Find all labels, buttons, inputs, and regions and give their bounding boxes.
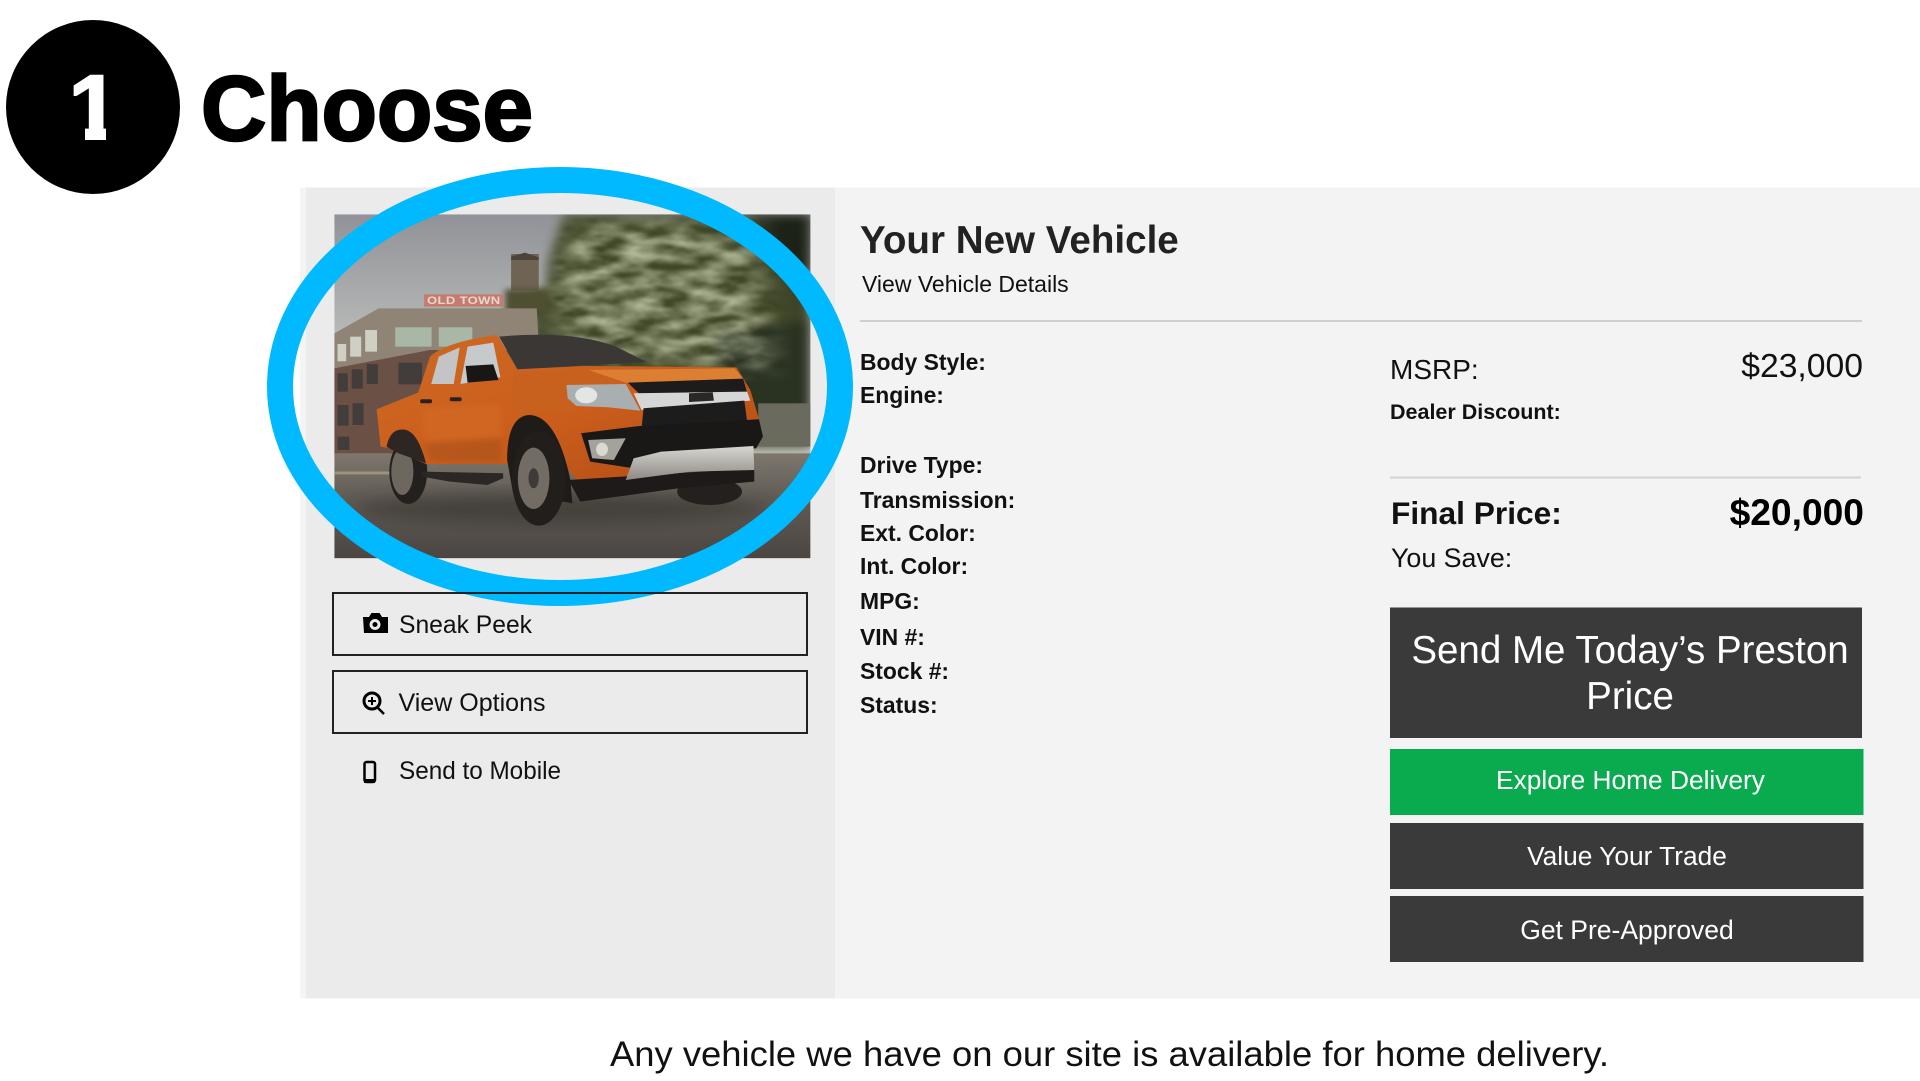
- button: Explore Home Delivery: Explore Home Delivery: [1496, 765, 1766, 795]
- pricing block: [1390, 347, 1864, 573]
- button: Get Pre-Approved: Get Pre-Approved: [1520, 915, 1734, 945]
- front wheel arch: [507, 415, 572, 503]
- button: Send Me Today's Preston Price: Price: [1586, 675, 1674, 718]
- fog lamp: [588, 438, 626, 460]
- vehicle specification labels: MPG:: [860, 588, 920, 614]
- link: view vehicle details: View Vehicle Details: [862, 271, 1069, 297]
- button: Sneak Peek: Sneak Peek: [399, 611, 532, 639]
- main grille: [642, 401, 747, 428]
- vehicle photo: orange pickup truck: [334, 214, 810, 558]
- highlight ellipse: [280, 180, 840, 593]
- button: Send Me Today's Preston Price: Send Me Today’s Preston: [1411, 629, 1849, 672]
- button: View Options: View Options: [398, 689, 546, 717]
- pricing block: $23,000: [1741, 347, 1863, 385]
- truck body: [377, 335, 760, 480]
- lower body black: [568, 468, 754, 502]
- button: Value Your Trade: [1390, 823, 1864, 889]
- vehicle heading: Your New Vehicle: [860, 219, 1179, 262]
- bumper: [581, 419, 763, 468]
- button: Get Pre-Approved: [1390, 896, 1864, 962]
- pricing block: Final Price:: [1391, 495, 1562, 531]
- door handles: [420, 399, 432, 403]
- pricing block: MSRP:: [1390, 354, 1479, 385]
- button: Value Your Trade: Value Your Trade: [1527, 841, 1727, 871]
- vehicle specification labels: Stock #:: [860, 658, 949, 684]
- button: View Options: [333, 671, 807, 733]
- step number badge: 1: [68, 57, 120, 159]
- panel: vehicle media column: [300, 188, 835, 998]
- side windows: [431, 347, 460, 384]
- icon: zoom magnifier: [364, 693, 384, 714]
- vehicle specification labels: Engine:: [860, 382, 944, 408]
- vehicle specification labels: Int. Color:: [860, 553, 968, 579]
- vehicle specification labels: Body Style:: [860, 349, 986, 375]
- pricing block: Dealer Discount:: [1390, 400, 1561, 424]
- vehicle specification labels: [860, 349, 1015, 718]
- icon: phone: [364, 762, 375, 783]
- button: Send Me Today's Preston Price: [1390, 608, 1862, 738]
- pricing block: $20,000: [1730, 491, 1864, 533]
- skid plate: [626, 446, 754, 480]
- front wheel: [513, 448, 562, 526]
- rear wheel arch: [387, 429, 426, 463]
- upper grille: [628, 379, 747, 394]
- vehicle specification labels: Ext. Color:: [860, 520, 976, 546]
- side mirror: [466, 364, 498, 383]
- running board: [421, 472, 503, 485]
- rear wheel: [389, 450, 428, 504]
- vehicle specification labels: Status:: [860, 692, 938, 718]
- vehicle specification labels: Transmission:: [860, 487, 1015, 513]
- button: Explore Home Delivery: [1390, 749, 1864, 815]
- button: Sneak Peek: [333, 593, 807, 655]
- step number badge: [6, 20, 180, 194]
- chrome bar: [634, 392, 750, 410]
- panel: vehicle card: [280, 180, 1920, 998]
- windshield: [499, 335, 647, 369]
- vehicle photo: orange pickup truck: OLD TOWN: [427, 294, 500, 307]
- far front wheel: [677, 483, 742, 505]
- pricing block: You Save:: [1391, 543, 1512, 573]
- title: Choose: [201, 58, 533, 160]
- headlight: [566, 384, 640, 411]
- footer caption: Any vehicle we have on our site is available for home delivery.: [610, 1035, 1609, 1074]
- link: Send to Mobile: Send to Mobile: [399, 757, 561, 785]
- vehicle specification labels: VIN #:: [860, 624, 925, 650]
- icon: camera: [363, 613, 388, 633]
- vehicle specification labels: Drive Type:: [860, 452, 983, 478]
